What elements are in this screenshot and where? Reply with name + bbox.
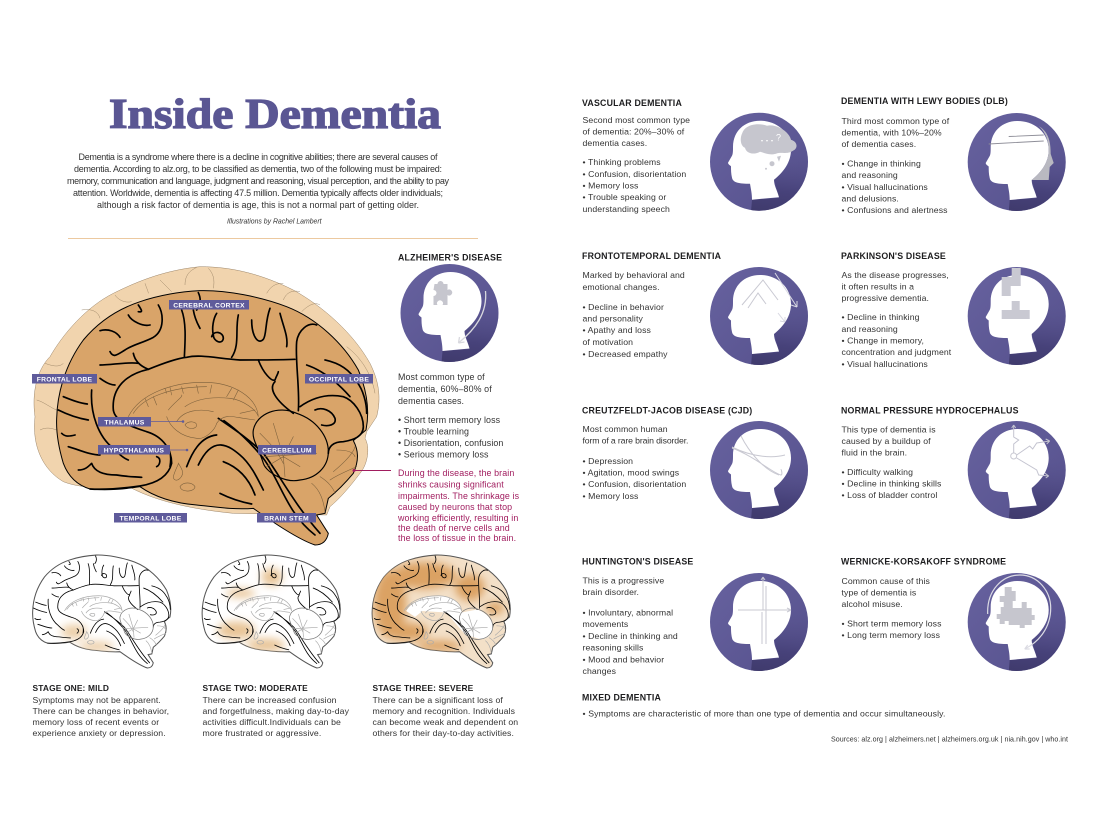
- panel: frontotemporal dementia: and personality: [582, 314, 643, 324]
- intro text: dementia. According to alz.org, to be classified as dementia, two of the following must be impaired:: [74, 164, 442, 174]
- panel: stage one text: experience anxiety or depression.: [32, 728, 166, 738]
- panel: frontotemporal dementia: • Decreased empathy: [582, 349, 668, 359]
- panel: normal pressure hydrocephalus: [841, 406, 1077, 530]
- panel: vascular dementia: • Thinking problems: [582, 157, 661, 167]
- panel: stage two text: and forgetfulness, making day-to-day: [202, 706, 350, 716]
- panel: frontotemporal dementia: of motivation: [582, 337, 633, 347]
- panel: Parkinson's disease: • Visual hallucinations: [842, 359, 928, 369]
- panel: normal pressure hydrocephalus: NORMAL PRESSURE HYDROCEPHALUS: [841, 406, 1019, 416]
- illustration credit: Illustrations by Rachel Lambert: [227, 218, 323, 226]
- panel: stage two text: STAGE TWO: MODERATE: [202, 683, 308, 693]
- callout: brain shrinkage: caused by neurons that stop: [398, 502, 512, 512]
- panel: dementia with Lewy bodies: • Visual hallucinations: [842, 182, 928, 192]
- panel: stage one text: There can be changes in behavior,: [32, 706, 169, 716]
- label: brain stem: [257, 513, 316, 522]
- panel: stage three text: STAGE THREE: SEVERE: [372, 683, 474, 693]
- arrow: shrinkage callout: [352, 469, 391, 472]
- panel: Huntington's disease: HUNTINGTON'S DISEASE: [582, 556, 694, 566]
- panel: Wernicke-Korsakoff syndrome: WERNICKE-KORSAKOFF SYNDROME: [841, 556, 1006, 566]
- intro text: [67, 152, 450, 210]
- brain labels: [32, 300, 373, 522]
- panel: Wernicke-Korsakoff syndrome: alcohol misuse.: [842, 599, 903, 609]
- label: cerebellum: CEREBELLUM: [262, 448, 312, 454]
- panel: stage two text: activities difficult.Individuals can be: [202, 717, 341, 727]
- callout: brain shrinkage: [397, 468, 520, 543]
- panel: Parkinson's disease: and reasoning: [842, 324, 898, 334]
- panel: stage three text: others for their day-to-day activities.: [372, 728, 514, 738]
- icon: head with cross arrows: [710, 573, 819, 682]
- panel: mixed dementia: • Symptoms are characteristic of more than one type of dementia and occur simultaneously.: [582, 708, 946, 718]
- panel: Alzheimer's disease: [397, 252, 520, 543]
- panel: stage three brain: [372, 555, 510, 668]
- label: frontal lobe: [32, 374, 97, 384]
- panel: frontotemporal dementia: FRONTOTEMPORAL DEMENTIA: [582, 251, 722, 261]
- panel: stage one brain: [33, 555, 171, 668]
- icon: head with puzzle and arc: [968, 573, 1077, 682]
- intro text: memory, communication and language, judgment and reasoning, visual perception, and the ability to pay: [67, 176, 450, 186]
- label: thalamus: THALAMUS: [104, 420, 145, 426]
- panel: Creutzfeldt-Jacob disease: • Agitation, mood swings: [582, 468, 680, 478]
- panel: normal pressure hydrocephalus: • Difficulty walking: [842, 467, 913, 477]
- panel: normal pressure hydrocephalus: • Loss of bladder control: [842, 490, 937, 500]
- panel: Creutzfeldt-Jacob disease: • Confusion, disorientation: [582, 479, 686, 489]
- description: [398, 372, 503, 460]
- callout: brain shrinkage: working efficiently, resulting in: [397, 513, 518, 523]
- panel: stage three text: memory and recognition. Individuals: [372, 706, 516, 716]
- panel: Huntington's disease: reasoning skills: [582, 642, 644, 652]
- sources: Sources: alz.org | alzheimers.net | alzheimers.org.uk | nia.nih.gov | who.int: [831, 736, 1068, 744]
- panel: Parkinson's disease: it often results in a: [842, 282, 914, 292]
- panel: Parkinson's disease: concentration and judgment: [842, 347, 952, 357]
- label: occipital lobe: OCCIPITAL LOBE: [309, 376, 369, 384]
- panel: normal pressure hydrocephalus: fluid in the brain.: [842, 448, 907, 458]
- label: cerebellum: [258, 445, 316, 454]
- panel: vascular dementia: • Trouble speaking or: [582, 192, 666, 202]
- panel: vascular dementia: dementia cases.: [582, 138, 647, 148]
- panel: mixed dementia: [582, 692, 946, 718]
- panel: stage one text: Symptoms may not be apparent.: [32, 695, 161, 705]
- panel: dementia with Lewy bodies: • Confusions and alertness: [842, 205, 948, 215]
- panel: dementia with Lewy bodies: • Change in thinking: [842, 158, 921, 168]
- description: dementia cases.: [398, 396, 464, 406]
- panel: stage one text: [32, 683, 169, 738]
- icon: head with branching arrows: [968, 421, 1077, 530]
- panel: Huntington's disease: • Decline in thinking and: [582, 631, 678, 641]
- panel: dementia with Lewy bodies: [841, 96, 1077, 222]
- panel: Creutzfeldt-Jacob disease: • Depression: [582, 456, 633, 466]
- callout: brain shrinkage: During the disease, the brain: [398, 468, 514, 478]
- panel: Wernicke-Korsakoff syndrome: type of dementia is: [842, 588, 917, 598]
- panel: Huntington's disease: brain disorder.: [582, 587, 639, 597]
- icon: head with chevrons and arrows: [710, 267, 819, 376]
- panel: frontotemporal dementia: • Decline in behavior: [582, 302, 664, 312]
- callout: brain shrinkage: the death of nerve cells and: [398, 523, 510, 533]
- label: temporal lobe: TEMPORAL LOBE: [119, 516, 182, 522]
- panel: frontotemporal dementia: • Apathy and loss: [582, 325, 652, 335]
- panel: Parkinson's disease: • Change in memory,: [842, 336, 924, 346]
- panel: Parkinson's disease: progressive dementia.: [842, 293, 929, 303]
- main brain illustration: [34, 267, 379, 545]
- panel: Creutzfeldt-Jacob disease: Most common human: [582, 424, 668, 434]
- panel: Wernicke-Korsakoff syndrome: • Long term memory loss: [842, 630, 941, 640]
- panel: stage three text: can become weak and dependent on: [372, 717, 518, 727]
- label: hypothalamus: HYPOTHALAMUS: [104, 448, 164, 454]
- panel: vascular dementia: Second most common type: [582, 115, 690, 125]
- panel: stage three text: There can be a significant loss of: [372, 695, 503, 705]
- panel: stage two text: [202, 683, 350, 738]
- panel: frontotemporal dementia: emotional changes.: [582, 282, 660, 292]
- panel: Wernicke-Korsakoff syndrome: Common cause of this: [842, 576, 930, 586]
- description: • Disorientation, confusion: [398, 438, 503, 448]
- panel: Creutzfeldt-Jacob disease: [582, 406, 819, 530]
- icon: head with crossing lines: [710, 421, 819, 530]
- panel: normal pressure hydrocephalus: This type of dementia is: [842, 424, 936, 434]
- intro text: although a risk factor of dementia is age, this is not a normal part of getting older.: [97, 200, 419, 210]
- panel: vascular dementia: • Confusion, disorientation: [582, 169, 686, 179]
- intro text: attention. Worldwide, dementia is affecting 47.5 million. Dementia typically affects older individuals;: [73, 188, 443, 198]
- panel: dementia with Lewy bodies: DEMENTIA WITH LEWY BODIES (DLB): [841, 96, 1008, 106]
- label: brain stem: BRAIN STEM: [264, 516, 309, 522]
- panel: Parkinson's disease: • Decline in thinking: [842, 312, 920, 322]
- label: occipital lobe: [305, 374, 373, 384]
- panel: stage two text: There can be increased confusion: [202, 695, 337, 705]
- panel: Creutzfeldt-Jacob disease: form of a rare brain disorder.: [582, 436, 688, 446]
- panel: Creutzfeldt-Jacob disease: CREUTZFELDT-JACOB DISEASE (CJD): [582, 406, 752, 416]
- panel: normal pressure hydrocephalus: caused by a buildup of: [842, 436, 931, 446]
- callout: brain shrinkage: shrinks causing significant: [398, 480, 504, 490]
- panel: Parkinson's disease: [841, 251, 1077, 376]
- panel: stage one text: STAGE ONE: MILD: [32, 683, 109, 693]
- panel: normal pressure hydrocephalus: • Decline in thinking skills: [842, 478, 942, 488]
- label: frontal lobe: FRONTAL LOBE: [37, 376, 93, 384]
- panel: Huntington's disease: movements: [582, 619, 629, 629]
- icon: head with thought cloud: [710, 113, 819, 222]
- title: Inside Dementia: [109, 92, 441, 138]
- panel: stage one text: memory loss of recent events or: [32, 717, 159, 727]
- panel: Parkinson's disease: As the disease progresses,: [842, 270, 949, 280]
- panel: Huntington's disease: This is a progressive: [582, 576, 664, 586]
- description: • Serious memory loss: [398, 450, 489, 460]
- description: dementia, 60%–80% of: [398, 384, 492, 394]
- icon: head with thought cloud: ?: [776, 133, 781, 143]
- panel: vascular dementia: understanding speech: [582, 204, 670, 214]
- panel: vascular dementia: VASCULAR DEMENTIA: [582, 98, 682, 108]
- description: • Short term memory loss: [398, 415, 501, 425]
- panel: frontotemporal dementia: [582, 251, 819, 376]
- panel: stage three text: [372, 683, 518, 738]
- label: hypothalamus: [98, 445, 188, 454]
- callout: brain shrinkage: impairments. The shrinkage is: [398, 491, 520, 501]
- panel: Huntington's disease: [582, 556, 819, 682]
- panel: vascular dementia: of dementia: 20%–30% of: [582, 126, 685, 136]
- panel: dementia with Lewy bodies: of dementia cases.: [842, 139, 916, 149]
- panel: Creutzfeldt-Jacob disease: • Memory loss: [582, 491, 639, 501]
- description: • Trouble learning: [398, 426, 469, 436]
- panel: vascular dementia: • Memory loss: [582, 180, 639, 190]
- panel: dementia with Lewy bodies: and reasoning: [842, 170, 898, 180]
- panel: stage two brain: [202, 555, 340, 668]
- panel: mixed dementia: MIXED DEMENTIA: [582, 692, 661, 702]
- heading: ALZHEIMER'S DISEASE: [398, 252, 502, 262]
- panel: Parkinson's disease: PARKINSON'S DISEASE: [841, 251, 946, 261]
- icon: head with block shapes: [968, 267, 1077, 376]
- panel: Huntington's disease: changes: [582, 666, 617, 676]
- panel: frontotemporal dementia: Marked by behavioral and: [582, 270, 685, 280]
- panel: vascular dementia: [582, 98, 819, 222]
- label: thalamus: [98, 417, 184, 426]
- label: temporal lobe: [114, 513, 187, 522]
- panel: Huntington's disease: • Involuntary, abnormal: [582, 608, 673, 618]
- panel: dementia with Lewy bodies: and delusions.: [842, 194, 899, 204]
- label: cerebral cortex: [169, 300, 249, 310]
- label: cerebral cortex: CEREBRAL CORTEX: [173, 302, 245, 310]
- callout: brain shrinkage: the loss of tissue in the brain.: [398, 533, 516, 543]
- panel: Wernicke-Korsakoff syndrome: • Short term memory loss: [842, 618, 942, 628]
- icon: head with shadow profile: [968, 113, 1077, 222]
- panel: dementia with Lewy bodies: dementia, with 10%–20%: [842, 128, 942, 138]
- panel: stage two text: more frustrated or aggressive.: [202, 728, 321, 738]
- panel: Wernicke-Korsakoff syndrome: [841, 556, 1077, 682]
- description: Most common type of: [398, 372, 485, 382]
- intro text: Dementia is a syndrome where there is a decline in cognitive abilities; there are several causes of: [78, 152, 438, 162]
- icon: head with puzzle piece: [400, 264, 510, 373]
- panel: Huntington's disease: • Mood and behavior: [582, 654, 664, 664]
- panel: dementia with Lewy bodies: Third most common type of: [842, 116, 950, 126]
